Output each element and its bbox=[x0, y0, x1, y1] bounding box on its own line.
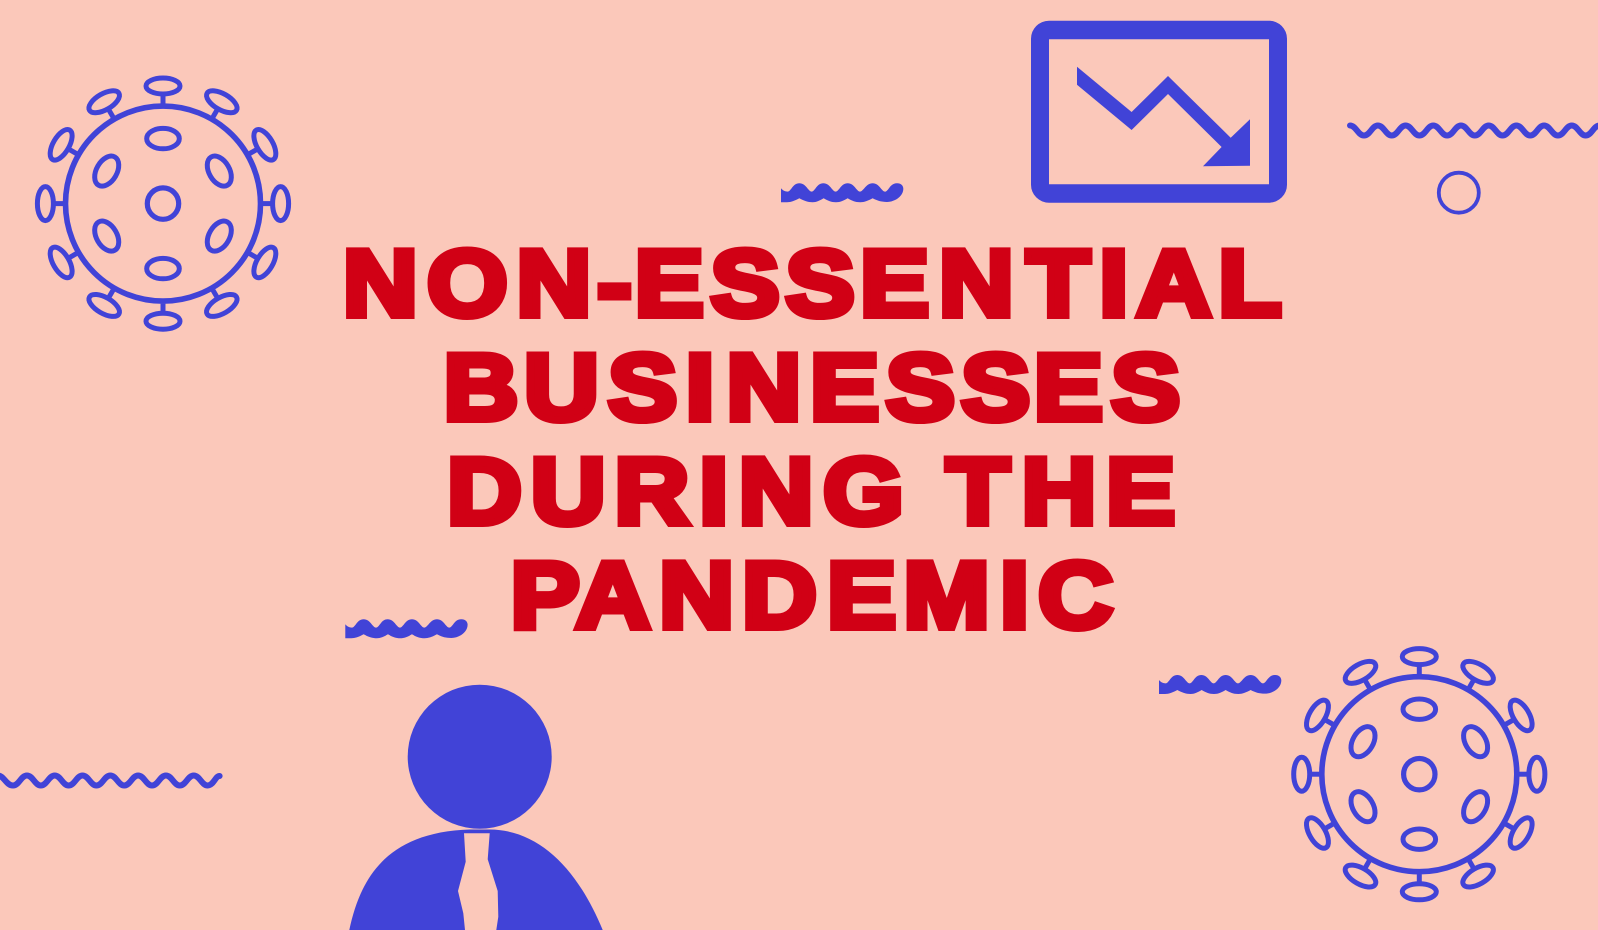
wave: thick squiggle above title bbox=[781, 183, 903, 202]
person head bbox=[408, 685, 552, 829]
wave: thick squiggle above lower virus bbox=[1159, 675, 1281, 694]
person body with tie bbox=[349, 830, 603, 930]
title line 3: DURING THE bbox=[447, 439, 1175, 543]
wave: thick squiggle left of Pandemic bbox=[345, 619, 468, 638]
icon: virus top left bbox=[37, 78, 289, 329]
title line 1: NON-ESSENTIAL bbox=[343, 231, 1282, 335]
title bbox=[343, 231, 1282, 647]
wave: top right squiggle bbox=[1350, 126, 1598, 136]
title line 2: BUSINESSES bbox=[444, 335, 1180, 439]
icon: virus bottom right bbox=[1294, 649, 1545, 900]
icon: businessperson bbox=[349, 685, 603, 930]
icon: small circle bbox=[1439, 173, 1479, 213]
title line 4: PANDEMIC bbox=[511, 543, 1113, 647]
wave: bottom left squiggle bbox=[0, 776, 220, 786]
icon: declining chart bbox=[1031, 21, 1287, 203]
